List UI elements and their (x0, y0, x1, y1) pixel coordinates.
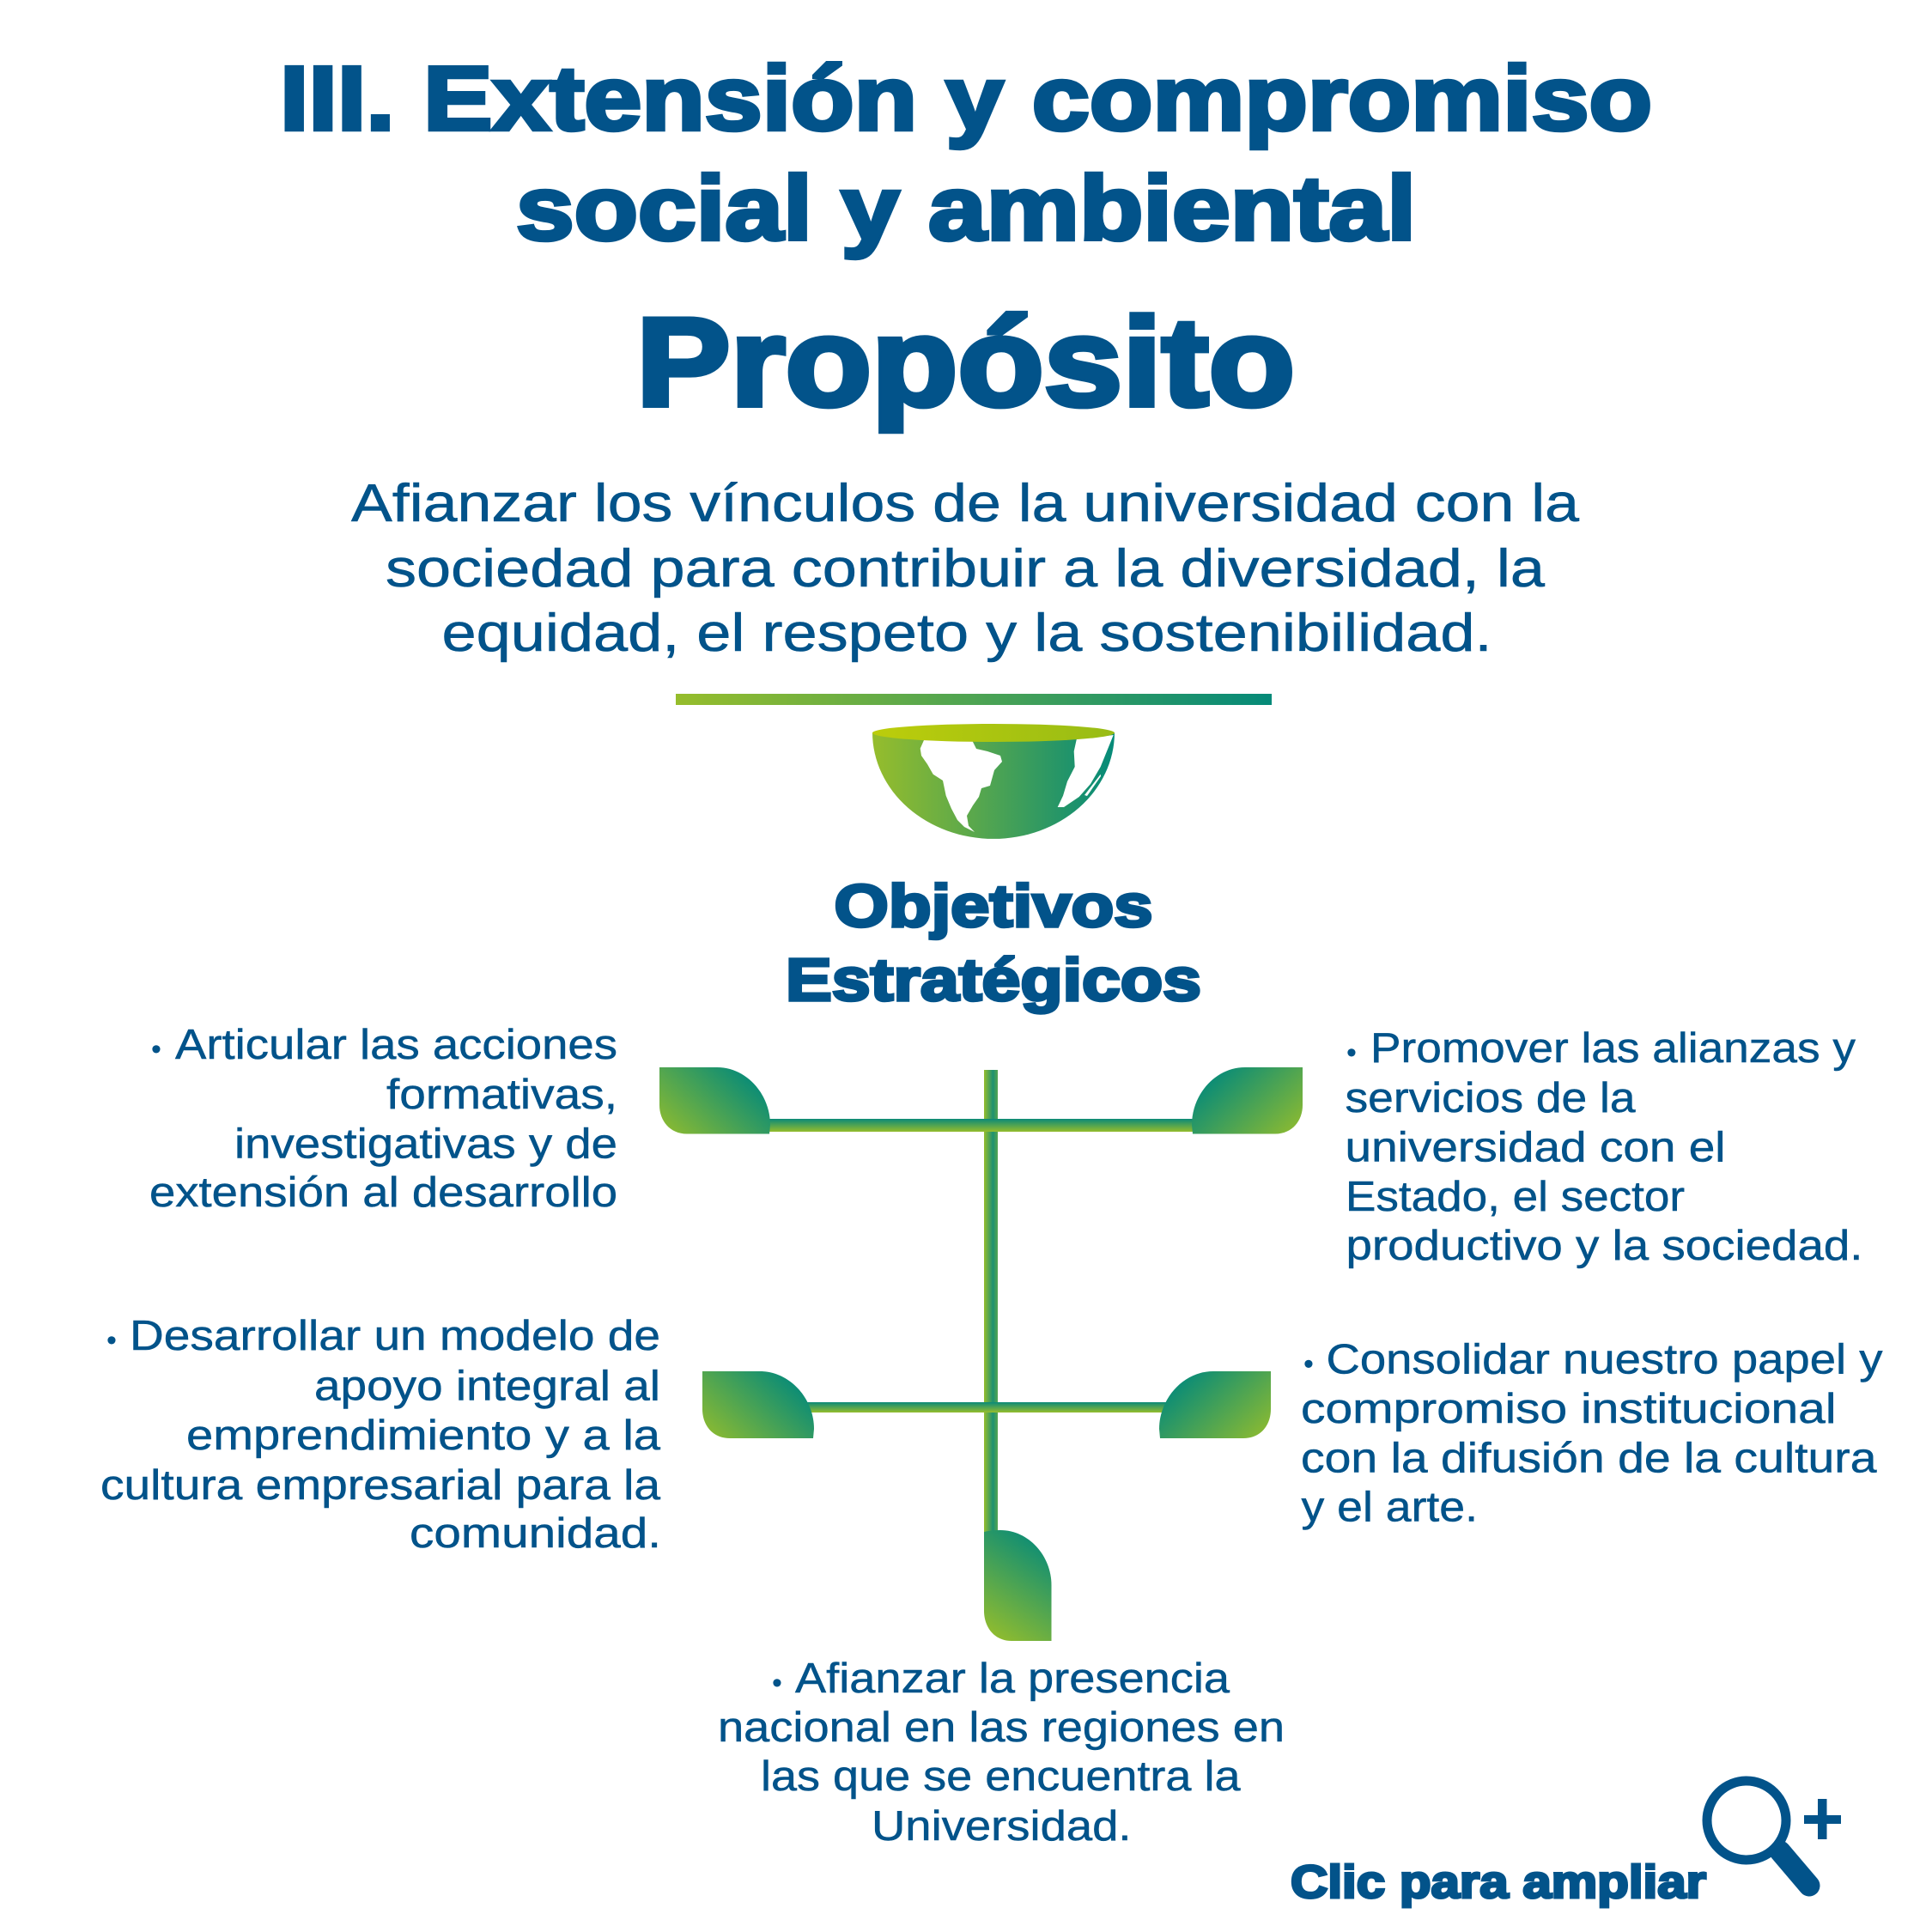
objective: Consolidar: compromiso institucional (1301, 1386, 1836, 1432)
stem (984, 1070, 998, 1551)
objective: Afianzar: • (772, 1667, 782, 1699)
purpose text block: equidad, el respeto y la sostenibilidad. (441, 604, 1492, 663)
objective: Consolidar: • (1303, 1348, 1314, 1381)
gradient divider bar (676, 694, 1272, 705)
objective: Desarrollar: • (106, 1324, 117, 1357)
objective: Promover (1345, 1025, 1863, 1269)
objective: Promover: • (1346, 1036, 1357, 1069)
objective: Desarrollar: cultura empresarial para la (100, 1462, 661, 1509)
title (280, 48, 1652, 259)
leaf: lower left (702, 1371, 814, 1438)
objective: Promover: productivo y la sociedad. (1346, 1223, 1863, 1269)
objective: Articular: formativas, (386, 1072, 617, 1118)
objective: Afianzar: las que se encuentra la (761, 1753, 1241, 1800)
heading: Objetivos Estratégicos: Objetivos (835, 872, 1152, 939)
label: Clic para ampliar: Clic para ampliar (1291, 1856, 1706, 1908)
purpose text block: sociedad para contribuir a la diversidad, la (386, 539, 1546, 598)
heading: Propósito: Propósito (636, 292, 1295, 432)
objective: Afianzar: nacional en las regiones en (718, 1704, 1285, 1751)
leaf: upper right (1192, 1067, 1303, 1133)
purpose text block (351, 474, 1580, 663)
leaf: lower right (1159, 1371, 1271, 1438)
purpose text block: Afianzar los vínculos de la universidad con la (351, 474, 1580, 533)
objective: Consolidar (1301, 1337, 1883, 1531)
objective: Desarrollar (100, 1313, 661, 1557)
objective: Desarrollar: apoyo integral al (314, 1364, 660, 1410)
title: social y ambiental (516, 158, 1416, 259)
objective: Promover: servicios de la (1345, 1075, 1636, 1121)
objective: Afianzar: Afianzar la presencia (795, 1656, 1230, 1702)
objective: Articular: investigativas y de (234, 1121, 617, 1168)
leaf: upper left (659, 1067, 770, 1133)
objective: Articular (149, 1022, 617, 1216)
objective: Desarrollar: Desarrollar un modelo de (130, 1313, 660, 1359)
objective: Afianzar: Universidad. (872, 1803, 1132, 1850)
objective: Promover: Promover las alianzas y (1370, 1025, 1856, 1072)
objective: Afianzar (718, 1656, 1285, 1850)
objective: Consolidar: Consolidar nuestro papel y (1326, 1337, 1883, 1383)
upper branch (738, 1119, 1228, 1132)
icon: half globe bowl (872, 724, 1115, 839)
objective: Consolidar: y el arte. (1302, 1485, 1478, 1531)
objective: Articular: • (151, 1033, 161, 1066)
objective: Desarrollar: emprendimiento y a la (186, 1413, 661, 1459)
diagram: plant with leaves (659, 1067, 1303, 1641)
objective: Promover: universidad con el (1345, 1125, 1726, 1171)
title: III. Extensión y compromiso (280, 48, 1652, 149)
objective: Articular: extensión al desarrollo (149, 1170, 617, 1216)
objective: Articular: Articular las acciones (175, 1022, 617, 1068)
heading: Objetivos Estratégicos: Estratégicos (786, 946, 1201, 1013)
icon: magnifier with plus (1707, 1781, 1841, 1886)
leaf: bottom (984, 1530, 1051, 1641)
objective: Promover: Estado, el sector (1346, 1174, 1685, 1220)
lower branch (773, 1402, 1202, 1413)
objective: Desarrollar: comunidad. (410, 1510, 661, 1557)
objective: Consolidar: con la difusión de la cultura (1301, 1436, 1877, 1482)
heading: Objetivos Estratégicos (786, 872, 1201, 1013)
